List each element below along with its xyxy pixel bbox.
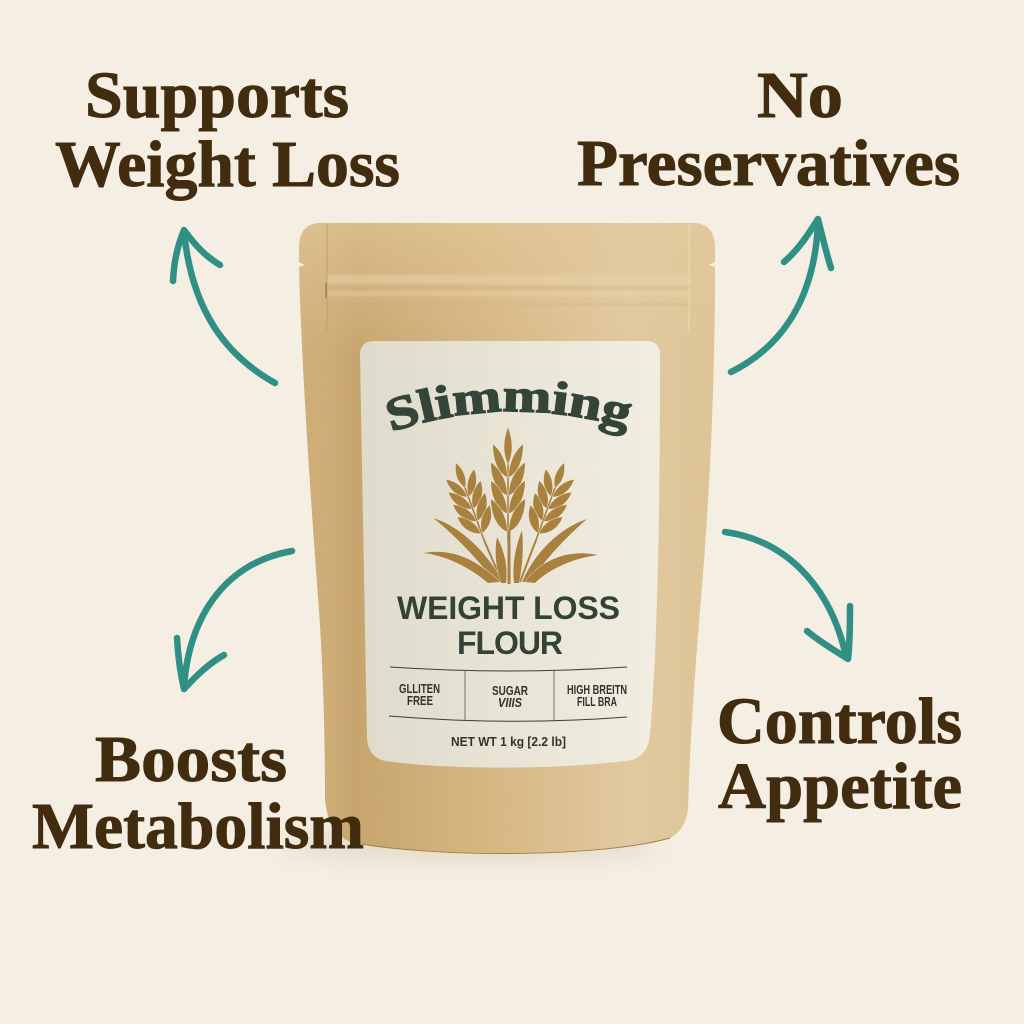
product pouch	[299, 223, 715, 854]
label heading: Weight Loss Flour: WEIGHT LOSS	[397, 590, 620, 626]
label title: Slimming: Slimming	[386, 381, 632, 436]
heading: Supports Weight Loss: Weight Loss	[55, 128, 400, 201]
label heading: Weight Loss Flour	[397, 590, 620, 661]
heading: No Preservatives: No	[757, 59, 843, 132]
pouch body	[299, 223, 715, 854]
feature: sugar	[492, 683, 528, 710]
feature: high protein: FILL BRA	[577, 694, 617, 709]
heading: Supports Weight Loss: Supports	[85, 59, 349, 132]
label feature table	[389, 667, 627, 721]
infographic canvas	[32, 72, 961, 876]
heading: No Preservatives	[577, 59, 960, 200]
wheat leaves	[423, 518, 598, 583]
feature: sugar: VIIIS	[498, 695, 522, 710]
arrow: to Boosts Metabolism	[177, 551, 292, 689]
feature: gluten free: GLLITEN	[399, 681, 440, 696]
feature: sugar: SUGAR	[492, 683, 528, 698]
heading: Controls Appetite: Appetite	[718, 750, 962, 823]
feature: high protein	[567, 682, 627, 709]
heading: Supports Weight Loss	[55, 59, 400, 201]
heading: Controls Appetite	[717, 685, 962, 823]
feature: gluten free: FREE	[407, 693, 433, 708]
heading: Boosts Metabolism	[32, 723, 364, 863]
arrow: to Controls Appetite	[725, 532, 850, 659]
label heading: Weight Loss Flour: FLOUR	[457, 625, 563, 661]
feature: gluten free	[399, 681, 440, 708]
feature: high protein: HIGH BREITN	[567, 682, 627, 697]
heading: Boosts Metabolism: Boosts	[95, 723, 287, 796]
heading: Controls Appetite: Controls	[717, 685, 962, 758]
front label	[360, 341, 660, 768]
pouch top tint, seams and zipper	[299, 223, 712, 330]
pouch shadow	[280, 833, 660, 859]
wheat ears	[440, 428, 580, 584]
heading: Boosts Metabolism: Metabolism	[32, 790, 364, 863]
arrow: to No Preservatives	[731, 219, 831, 372]
arrow: to Supports Weight Loss	[173, 230, 275, 383]
pouch bottom rim	[350, 838, 670, 854]
heading: No Preservatives: Preservatives	[577, 127, 960, 200]
wheat illustration	[423, 428, 598, 584]
net weight: NET WT 1 kg [2.2 lb]	[451, 734, 566, 749]
